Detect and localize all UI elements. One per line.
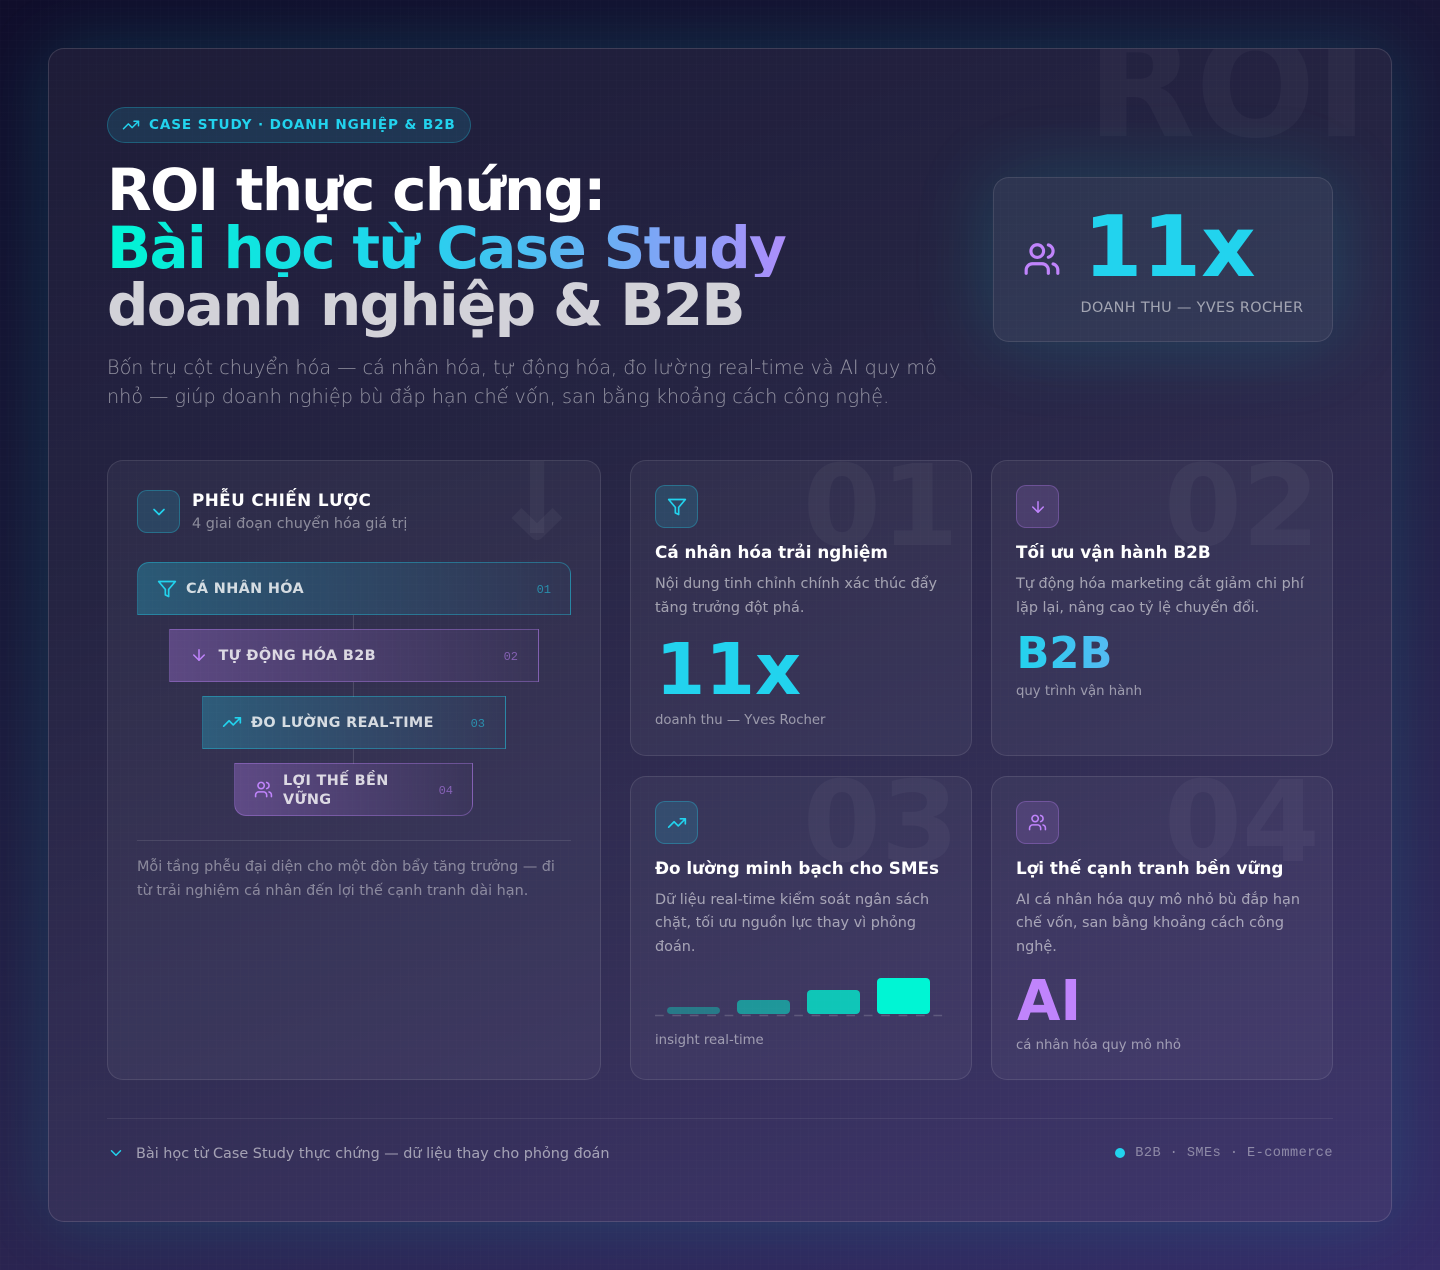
metric: B2B: B2B (1016, 629, 1112, 679)
metric value: 11x (1084, 198, 1256, 296)
description: Tự động hóa marketing cắt giảm chi phí (1016, 576, 1304, 592)
heading: Cá nhân hóa trải nghiệm (655, 542, 888, 562)
stage 3 label: ĐO LƯỜNG REAL-TIME (251, 715, 434, 731)
funnel stage 4 (234, 763, 473, 816)
stage 1 label: CÁ NHÂN HÓA (186, 581, 304, 597)
stage 3 number: 03 (471, 717, 485, 731)
description: chặt, tối ưu nguồn lực thay vì phỏng (655, 915, 916, 931)
footer tags: B2B · SMEs · E-commerce (1135, 1146, 1333, 1161)
icon: filter (158, 580, 176, 598)
description (1016, 575, 1304, 616)
card 02 (991, 460, 1333, 756)
icon: chevron down (110, 1150, 122, 1156)
ghost icon: arrow down (513, 461, 562, 534)
icon: users (1016, 801, 1059, 844)
chart caption: insight real-time (655, 1033, 764, 1048)
funnel heading: PHỄU CHIẾN LƯỢC (192, 490, 371, 510)
subtitle text (107, 356, 937, 408)
metric caption: cá nhân hóa quy mô nhỏ (1016, 1038, 1181, 1053)
icon: users (1024, 243, 1060, 275)
stage 4 label (283, 770, 389, 808)
description: AI cá nhân hóa quy mô nhỏ bù đắp hạn (1016, 892, 1300, 908)
subtitle text: nhỏ — giúp doanh nghiệp bù đắp hạn chế vốn, san bằng khoảng cách công nghệ. (107, 385, 889, 408)
metric label: DOANH THU — YVES ROCHER (1080, 300, 1303, 316)
subtitle text: Bốn trụ cột chuyển hóa — cá nhân hóa, tự động hóa, đo lường real-time và AI quy mô (107, 356, 937, 379)
icon: users (254, 782, 272, 798)
stage 4 label: VỮNG (283, 792, 331, 808)
description (1016, 891, 1300, 955)
icon: filter (655, 485, 698, 528)
panel: funnel (107, 460, 601, 1080)
badge text: CASE STUDY · DOANH NGHIỆP & B2B (149, 117, 456, 133)
stage 4 number: 04 (439, 784, 453, 798)
card 04 (991, 776, 1333, 1080)
icon: trending up (222, 717, 242, 727)
footer left (110, 1146, 609, 1162)
metric caption: doanh thu — Yves Rocher (655, 713, 826, 728)
description: Nội dung tinh chỉnh chính xác thúc đẩy (655, 576, 937, 592)
icon: trending up (655, 801, 698, 844)
funnel note: Mỗi tầng phễu đại diện cho một đòn bẩy tăng trưởng — đi (137, 859, 555, 875)
description (655, 892, 929, 955)
description (655, 576, 937, 616)
metric: 11x: 11x (656, 628, 801, 711)
metric: B2B (1016, 627, 1308, 681)
title (107, 156, 786, 339)
metric caption: quy trình vận hành (1016, 684, 1142, 699)
metric: AI: AI (1017, 969, 1081, 1034)
card 03 (630, 776, 972, 1080)
heading: Lợi thế cạnh tranh bền vững (1016, 858, 1283, 878)
icon: arrow down (1016, 485, 1059, 528)
badge: case study (107, 107, 471, 143)
funnel stage 2 (169, 629, 539, 682)
icon: arrow down (193, 649, 205, 661)
heading: Tối ưu vận hành B2B (1016, 542, 1211, 562)
footer right (1115, 1146, 1333, 1161)
icon: trending up (122, 120, 140, 130)
description: chế vốn, san bằng khoảng cách công (1016, 915, 1284, 931)
funnel stage 1 (137, 562, 571, 615)
footer text: Bài học từ Case Study thực chứng — dữ liệu thay cho phỏng đoán (136, 1146, 609, 1162)
description: lặp lại, nâng cao tỷ lệ chuyển đổi. (1016, 600, 1259, 616)
heading: Đo lường minh bạch cho SMEs (655, 858, 939, 878)
bar chart (655, 978, 942, 1016)
title: doanh nghiệp & B2B (107, 271, 744, 339)
metric card: 11x (992, 177, 1333, 342)
funnel subheading: 4 giai đoạn chuyển hóa giá trị (192, 516, 407, 532)
stage 1 number: 01 (537, 583, 551, 597)
stage 4 label: LỢI THẾ BỀN (283, 773, 389, 789)
title: Bài học từ Case Study (107, 214, 785, 282)
description: Dữ liệu real-time kiểm soát ngân sách (655, 892, 929, 908)
stage 2 label: TỰ ĐỘNG HÓA B2B (218, 648, 376, 664)
description: nghệ. (1016, 939, 1057, 955)
funnel note (137, 858, 555, 899)
description: tăng trưởng đột phá. (655, 600, 804, 616)
funnel stage 3 (202, 696, 506, 749)
status dot (1115, 1148, 1125, 1158)
funnel icon box (137, 490, 180, 533)
stage 2 number: 02 (504, 650, 518, 664)
title: ROI thực chứng: (107, 156, 605, 224)
card 01 (630, 460, 972, 756)
description: đoán. (655, 939, 695, 955)
funnel note: từ trải nghiệm cá nhân đến lợi thế cạnh tranh dài hạn. (137, 883, 528, 899)
